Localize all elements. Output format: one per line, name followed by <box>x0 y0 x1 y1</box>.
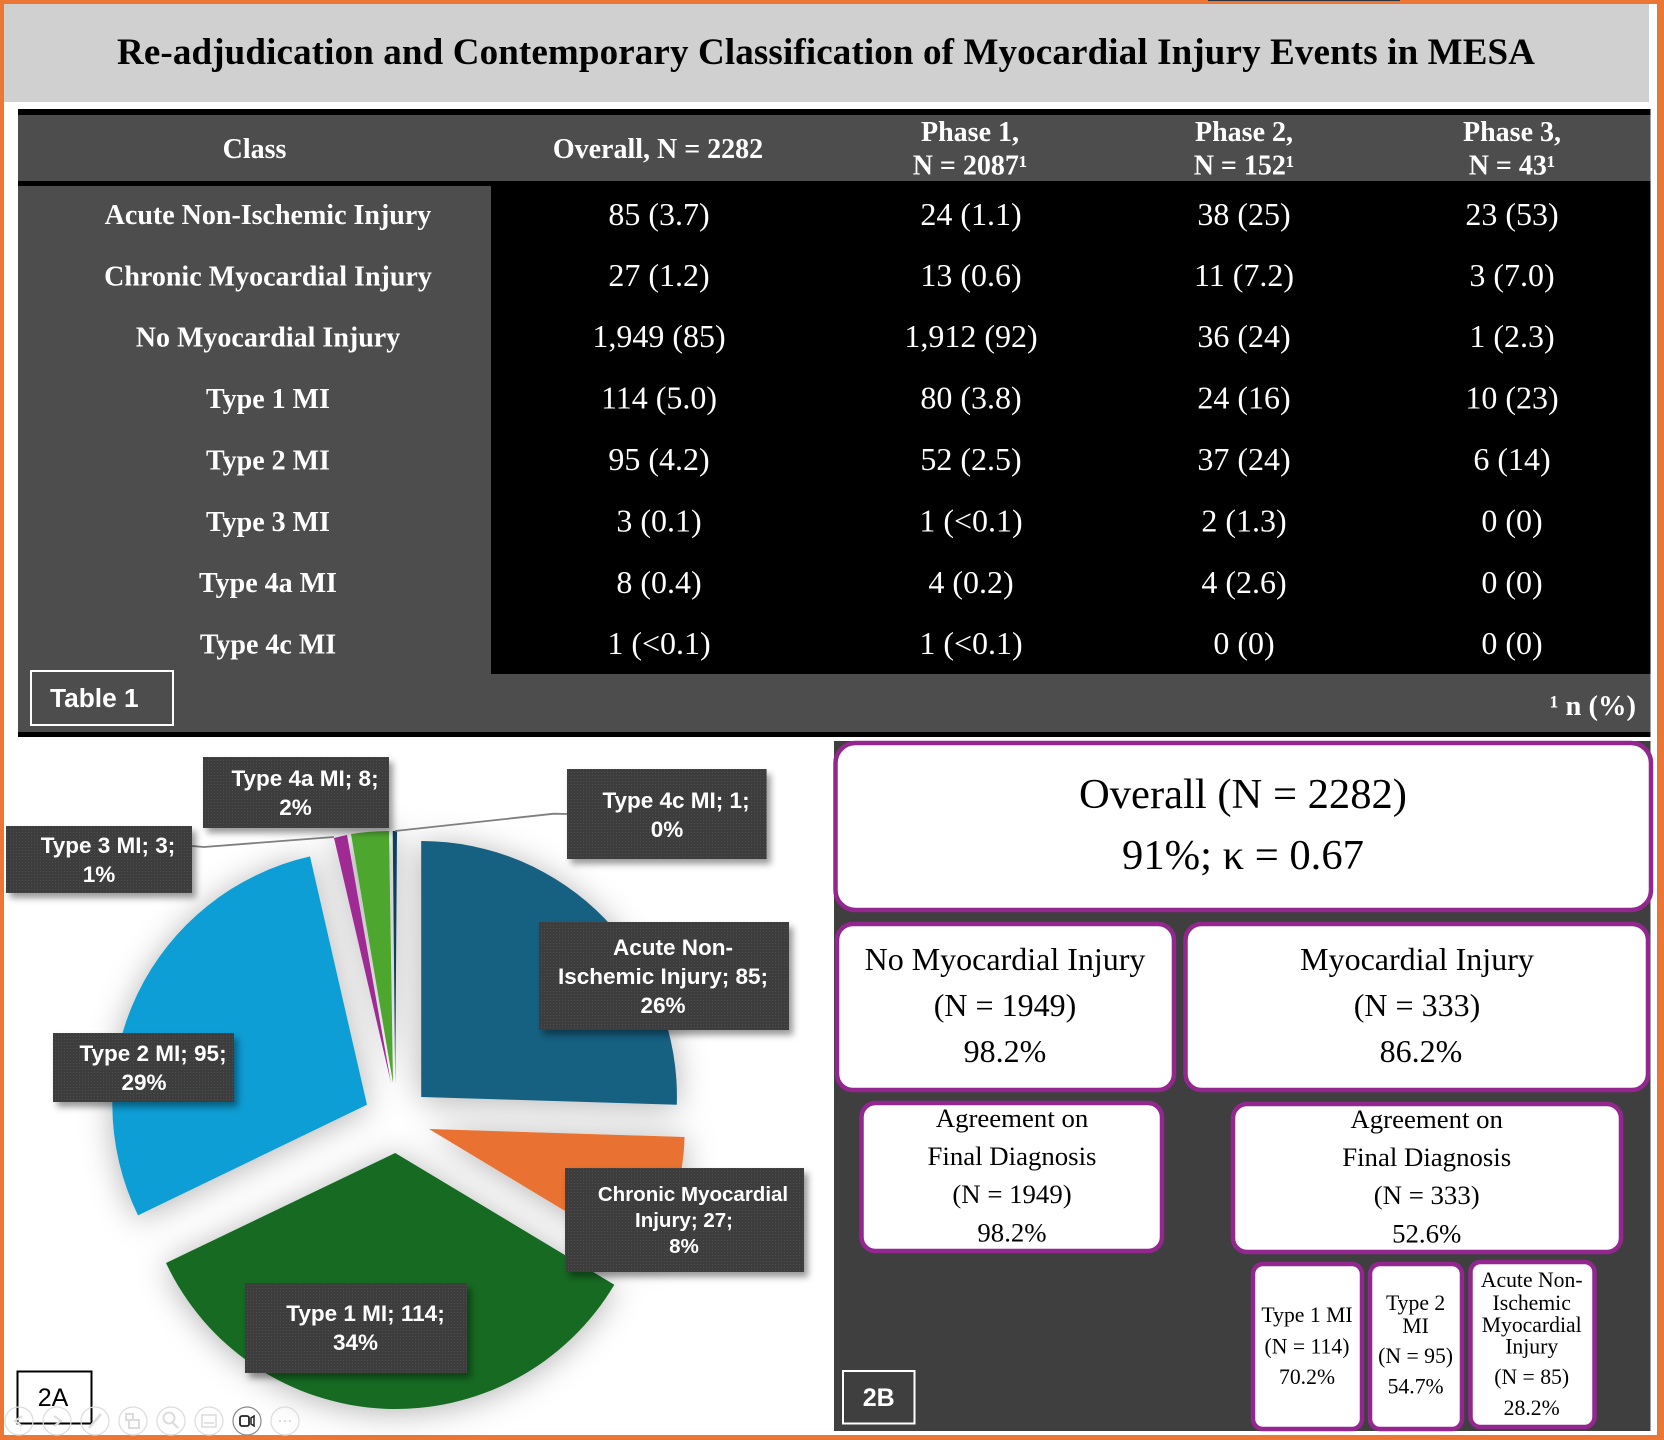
row labels: class: Type 4a MI <box>199 568 337 599</box>
column: overall values: 27 (1.2) <box>608 257 710 293</box>
box: no myocardial injury: 98.2% <box>964 1033 1046 1069</box>
label: Type 1 MI <box>245 1283 467 1373</box>
column: phase 3 values: 0 (0) <box>1481 564 1543 600</box>
column: phase 2 values: 37 (24) <box>1197 441 1291 477</box>
column: overall values: 8 (0.4) <box>616 564 702 600</box>
column: overall values: 85 (3.7) <box>608 196 710 232</box>
row labels: class: Type 4c MI <box>200 630 336 660</box>
column: phase 1 values: 1 (<0.1) <box>919 625 1023 661</box>
column: overall values: 1,949 (85) <box>592 318 726 354</box>
box: agreement, no injury: Final Diagnosis <box>928 1141 1096 1171</box>
label: Acute Non-Ischemic Injury <box>539 922 789 1030</box>
box: Type 2 MI <box>1370 1264 1462 1429</box>
label: Type 2 MI: Type 2 MI; 95; <box>79 1041 227 1066</box>
box: agreement, injury: Agreement on <box>1350 1104 1503 1134</box>
table header row <box>223 117 1561 182</box>
label: Acute Non-Ischemic Injury: Acute Non- <box>613 935 733 960</box>
badge: 2B <box>843 1371 914 1424</box>
box: Acute Non-Ischemic Myocardial Injury: Ischemic <box>1493 1291 1571 1315</box>
label: Type 4a MI: Type 4a MI; 8; <box>231 766 379 791</box>
box: myocardial injury: 86.2% <box>1380 1033 1462 1069</box>
footnote: ¹ n (%) <box>1550 691 1636 722</box>
box: overall agreement <box>836 743 1651 910</box>
column: phase 1 values: 24 (1.1) <box>920 196 1022 232</box>
column: phase 3 values: 10 (23) <box>1465 380 1559 416</box>
box: myocardial injury: Myocardial Injury <box>1300 941 1534 977</box>
panel: table 1 <box>18 109 1650 737</box>
panel: agreement flow 2B <box>834 741 1651 1431</box>
badge: Table 1: Table 1 <box>50 683 139 713</box>
title: Re-adjudication and Contemporary Classification of Myocardial Injury Events in MESA <box>117 32 1535 73</box>
column: phase 3 values: 3 (7.0) <box>1469 257 1555 293</box>
table header row: N = 43¹ <box>1469 150 1555 182</box>
row labels: class <box>104 200 432 660</box>
column: phase 2 values: 0 (0) <box>1213 625 1275 661</box>
row labels: class: Acute Non-Ischemic Injury <box>105 200 431 231</box>
label: Type 4a MI <box>203 757 389 828</box>
column: phase 2 values: 38 (25) <box>1197 196 1291 232</box>
column: phase 2 values: 24 (16) <box>1197 380 1291 416</box>
column: phase 2 values: 2 (1.3) <box>1201 502 1287 538</box>
box: Type 2 MI: 54.7% <box>1388 1374 1444 1398</box>
label: Type 4c MI: Type 4c MI; 1; <box>602 788 750 813</box>
box: Acute Non-Ischemic Myocardial Injury <box>1470 1262 1594 1427</box>
box: Acute Non-Ischemic Myocardial Injury: Injury <box>1505 1334 1558 1358</box>
row labels: class: No Myocardial Injury <box>136 323 400 354</box>
box: Type 2 MI: Type 2 <box>1386 1291 1445 1315</box>
label: Acute Non-Ischemic Injury: 26% <box>640 993 686 1018</box>
row labels: class: Type 2 MI <box>206 446 330 476</box>
table header row: N = 2087¹ <box>913 150 1027 182</box>
label: Type 4c MI <box>567 769 767 859</box>
label: Type 4a MI: 2% <box>279 795 312 820</box>
box: Acute Non-Ischemic Myocardial Injury: 28.2% <box>1504 1396 1560 1420</box>
box: myocardial injury <box>1186 924 1648 1090</box>
label: Type 1 MI: Type 1 MI; 114; <box>286 1301 445 1326</box>
badge: Table 1 <box>31 671 173 725</box>
table header row: Phase 3, <box>1463 117 1561 148</box>
column: phase 1 values: 80 (3.8) <box>920 380 1022 416</box>
column: phase 1 values: 1 (<0.1) <box>919 502 1023 538</box>
box: overall agreement: 91%; κ = 0.67 <box>1122 832 1364 879</box>
box: agreement, no injury: Agreement on <box>936 1103 1088 1133</box>
table header row: N = 152¹ <box>1194 150 1294 182</box>
column: phase 3 values: 1 (2.3) <box>1469 318 1555 354</box>
box: Acute Non-Ischemic Myocardial Injury: Acute Non- <box>1481 1268 1583 1292</box>
column: phase 3 values <box>1465 196 1559 661</box>
label: Type 3 MI: Type 3 MI; 3; <box>41 833 175 858</box>
column: phase 2 values: 4 (2.6) <box>1201 564 1287 600</box>
badge: 2B: 2B <box>863 1384 895 1412</box>
column: phase 3 values: 0 (0) <box>1481 625 1543 661</box>
row labels: class: Chronic Myocardial Injury <box>104 262 432 292</box>
column: overall values <box>592 196 726 661</box>
badge: 2A <box>18 1372 92 1424</box>
box: Type 2 MI: MI <box>1402 1314 1429 1338</box>
column: phase 2 values: 11 (7.2) <box>1194 257 1294 293</box>
box: myocardial injury: (N = 333) <box>1354 987 1480 1023</box>
box: agreement, injury: (N = 333) <box>1374 1180 1480 1210</box>
box: agreement, no injury <box>862 1103 1162 1251</box>
column: overall values: 3 (0.1) <box>616 502 702 538</box>
box: agreement, no injury: 98.2% <box>977 1218 1047 1248</box>
label: Chronic Myocardial Injury: Injury; 27; <box>635 1209 733 1232</box>
label: Chronic Myocardial Injury: Chronic Myocardial <box>598 1183 788 1206</box>
box: no myocardial injury <box>837 924 1174 1090</box>
column: phase 2 values: 36 (24) <box>1197 318 1291 354</box>
label: Chronic Myocardial Injury <box>565 1168 804 1272</box>
row labels: class: Type 3 MI <box>206 507 330 538</box>
column: phase 1 values: 4 (0.2) <box>928 564 1014 600</box>
row labels: class: Type 1 MI <box>206 384 330 415</box>
table header row: Phase 1, <box>921 117 1019 148</box>
label: Type 2 MI: 29% <box>121 1070 167 1095</box>
box: Type 1 MI: 70.2% <box>1279 1365 1335 1389</box>
box: overall agreement: Overall (N = 2282) <box>1079 771 1407 818</box>
label: Type 4c MI: 0% <box>651 817 683 842</box>
box: Acute Non-Ischemic Myocardial Injury: Myocardial <box>1482 1313 1582 1337</box>
label: Acute Non-Ischemic Injury: Ischemic Injury; 85; <box>558 964 768 989</box>
column: phase 1 values <box>904 196 1038 661</box>
label: Type 3 MI <box>6 826 192 893</box>
column: overall values: 1 (<0.1) <box>607 625 711 661</box>
title banner <box>4 4 1649 102</box>
icon row: slideshow toolbar <box>5 1407 299 1435</box>
badge: 2A: 2A <box>38 1384 69 1412</box>
table header row: Phase 2, <box>1195 117 1293 148</box>
box: Type 2 MI: (N = 95) <box>1378 1344 1453 1368</box>
column: overall values: 95 (4.2) <box>608 441 710 477</box>
box: Type 1 MI <box>1253 1264 1362 1429</box>
pie slices <box>112 831 685 1409</box>
column: phase 3 values: 0 (0) <box>1481 502 1543 538</box>
label: Type 2 MI <box>53 1033 234 1102</box>
label: Type 3 MI: 1% <box>83 862 115 887</box>
table header row: Overall, N = 2282 <box>553 134 763 165</box>
box: agreement, injury <box>1233 1104 1621 1252</box>
label: Type 1 MI: 34% <box>333 1330 378 1355</box>
column: phase 2 values <box>1194 196 1294 661</box>
box: agreement, injury: Final Diagnosis <box>1342 1142 1511 1172</box>
column: phase 3 values: 23 (53) <box>1465 196 1559 232</box>
box: agreement, injury: 52.6% <box>1392 1218 1461 1248</box>
column: phase 1 values: 1,912 (92) <box>904 318 1038 354</box>
box: Type 1 MI: Type 1 MI <box>1261 1303 1353 1327</box>
chart: pie 2A <box>5 757 804 1435</box>
table header row: Class <box>223 134 286 165</box>
leader lines <box>192 814 567 847</box>
column: phase 1 values: 13 (0.6) <box>920 257 1022 293</box>
box: no myocardial injury: No Myocardial Injury <box>865 941 1145 977</box>
label: Chronic Myocardial Injury: 8% <box>669 1235 699 1258</box>
box: agreement, no injury: (N = 1949) <box>952 1179 1072 1209</box>
box: Acute Non-Ischemic Myocardial Injury: (N = 85) <box>1494 1365 1569 1389</box>
box: Type 1 MI: (N = 114) <box>1265 1334 1349 1358</box>
column: phase 1 values: 52 (2.5) <box>920 441 1022 477</box>
column: phase 3 values: 6 (14) <box>1473 441 1551 477</box>
column: overall values: 114 (5.0) <box>601 380 717 416</box>
box: no myocardial injury: (N = 1949) <box>934 987 1076 1023</box>
